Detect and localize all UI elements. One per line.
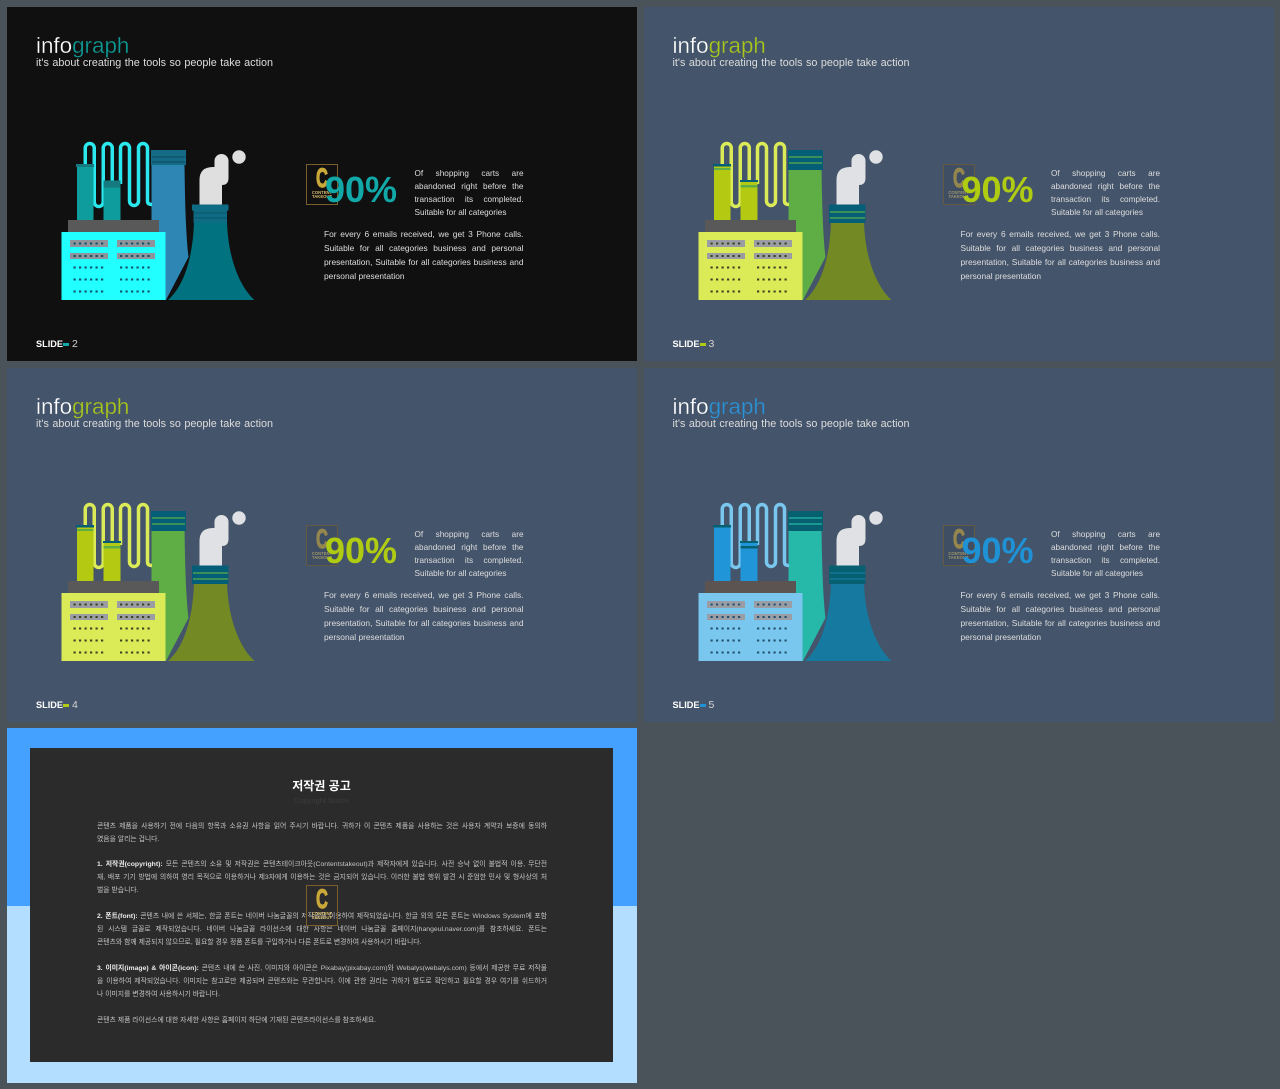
panel: slide 5	[644, 368, 1274, 722]
panel: copyright notice	[7, 728, 637, 1083]
text block: emails: Suitable for all categories business and personal	[960, 604, 1160, 614]
text block: emails: For every 6 emails received, we get 3 Phone calls.	[324, 590, 524, 600]
text block: shopping carts: Suitable for all categories	[1051, 568, 1143, 578]
text block: shopping carts: abandoned right before the	[414, 182, 524, 190]
subtitle: it's about creating the tools so people take action	[672, 418, 910, 430]
title: infograph	[36, 33, 129, 58]
logo watermark: CONTENT	[948, 550, 969, 556]
text block: shopping carts: transaction its completed.	[1051, 556, 1160, 564]
text block: emails	[960, 229, 1160, 281]
logo watermark: TAKEOUT	[312, 555, 332, 560]
text block: shopping carts	[414, 168, 524, 216]
subtitle: it's about creating the tools so people take action	[36, 418, 273, 430]
statistic: 90%: 90%	[962, 169, 1034, 210]
notice section 2: 된 시스템 글꼴로 제작되었습니다. 네이버 나눔글꼴 라이선스에 대한 사항은 네이버 나눔글꼴 홈페이지(hangeul.naver.com)를 참조하세요. 폰트는	[97, 926, 547, 933]
statistic: 90%: 90%	[962, 530, 1034, 571]
text block: shopping carts: Suitable for all categories	[414, 568, 506, 578]
slide number	[36, 338, 78, 350]
text block: emails: presentation, Suitable for all categories business and	[960, 257, 1160, 267]
slide number: SLIDE	[36, 339, 63, 349]
logo watermark: CONTENT	[312, 190, 332, 194]
notice section 3	[97, 964, 547, 998]
text block: emails	[324, 229, 524, 281]
text block: emails: presentation, Suitable for all categories business and	[324, 618, 524, 628]
text block: shopping carts: transaction its completed.	[414, 194, 524, 204]
panel: slide 2	[7, 7, 637, 361]
logo watermark: TAKEOUT	[949, 555, 968, 560]
logo watermark: CONTENT	[948, 190, 969, 194]
text block: emails: Suitable for all categories business and personal	[324, 243, 524, 253]
text block: emails: Suitable for all categories business and personal	[960, 243, 1160, 253]
logo watermark	[306, 525, 338, 566]
notice intro: 였음을 알리는 겁니다.	[97, 836, 159, 843]
notice section 2: 2. 폰트(font): 콘텐츠 내에 쓴 서체는, 한글 폰트는 네이버 나눔글꼴의 저작권을 이용하여 제작되었습니다. 한글 외의 모든 폰트는 Windows System에 포함	[97, 913, 547, 920]
slide number	[36, 698, 78, 710]
text block: shopping carts: abandoned right before the	[1051, 182, 1160, 190]
notice section 3: 3. 이미지(image) & 아이콘(icon): 콘텐츠 내에 쓴 사진, 이미지와 아이콘은 Pixabay(pixabay.com)와 Webalys(webalys.com) 등에서 제공한 무료 저작물	[97, 965, 547, 972]
text block: emails: presentation, Suitable for all categories business and	[324, 257, 524, 267]
notice section 1	[97, 860, 547, 894]
notice section 2	[97, 912, 547, 946]
text block: emails: For every 6 emails received, we get 3 Phone calls.	[960, 229, 1160, 239]
text block: emails: personal presentation	[324, 632, 405, 642]
slide number	[672, 338, 714, 350]
notice section 1: 벌을 받습니다.	[97, 887, 139, 894]
text block: shopping carts	[1051, 530, 1160, 578]
slide number: 2	[72, 338, 78, 350]
text block: shopping carts: Of shopping carts are	[414, 168, 524, 178]
text block: shopping carts: abandoned right before the	[414, 542, 524, 552]
factory illustration	[698, 142, 892, 300]
text block: emails	[324, 590, 524, 642]
logo watermark	[306, 885, 338, 926]
logo watermark	[942, 525, 974, 566]
factory illustration	[62, 142, 254, 300]
logo watermark: TAKEOUT	[312, 915, 332, 920]
notice section 1: 1. 저작권(copyright): 모든 콘텐츠의 소유 및 저작권은 콘텐츠테이크아웃(Contentstakeout)과 제작자에게 있습니다. 사전 승낙 없이 불법적 이용, 무단전	[97, 861, 547, 868]
panel: slide 4	[7, 368, 637, 722]
logo watermark: TAKEOUT	[312, 194, 332, 199]
factory illustration	[62, 502, 254, 661]
text block: emails: personal presentation	[960, 271, 1041, 281]
subtitle: it's about creating the tools so people take action	[672, 56, 910, 68]
notice intro	[97, 822, 547, 843]
slide number: 4	[72, 698, 78, 710]
slide number: SLIDE	[36, 700, 63, 710]
notice card	[30, 748, 613, 1062]
notice section 1: 재, 배포 기기 방법에 의하여 영리 목적으로 이용하거나 제3자에게 이용하는 것은 금지되어 있습니다. 이러한 불법 행위 발견 시 준엄한 민사 및 형사상의 처	[97, 874, 547, 881]
text block: shopping carts: Of shopping carts are	[414, 530, 524, 538]
slide number: SLIDE	[672, 339, 700, 349]
title: infograph	[672, 394, 766, 419]
logo watermark: CONTENT	[312, 550, 332, 556]
text block: shopping carts	[414, 530, 524, 578]
notice heading: 저작권 공고	[292, 779, 351, 793]
logo watermark	[306, 164, 338, 205]
text block: emails: For every 6 emails received, we get 3 Phone calls.	[324, 229, 524, 239]
text block: shopping carts: Of shopping carts are	[1051, 530, 1160, 538]
notice section 3: 을 이용하여 제작되었습니다. 이미지는 참고로만 제공되며 콘텐츠와는 무관합니다. 이에 관한 권리는 귀하가 별도로 확인하고 필요할 경우 여기를 쉬드하거	[97, 978, 547, 985]
notice license line: 콘텐츠 제품 라이선스에 대한 자세한 사항은 홈페이지 하단에 기재된 콘텐츠라이선스를 참조하세요.	[97, 1017, 376, 1024]
panel: slide 3	[644, 7, 1274, 361]
logo watermark	[942, 164, 974, 205]
slide number: SLIDE	[672, 700, 700, 710]
notice subheading: Copyright Notice	[294, 796, 349, 805]
subtitle: it's about creating the tools so people take action	[36, 56, 273, 68]
factory illustration	[698, 502, 892, 661]
text block: emails: personal presentation	[324, 271, 405, 281]
logo watermark: CONTENT	[312, 910, 332, 916]
statistic: 90%: 90%	[325, 169, 397, 210]
text block: emails: Suitable for all categories business and personal	[324, 604, 524, 614]
text block: shopping carts: transaction its completed.	[1051, 194, 1160, 204]
text block: emails: personal presentation	[960, 632, 1041, 642]
text block: emails: presentation, Suitable for all categories business and	[960, 618, 1160, 628]
text block: shopping carts: abandoned right before the	[1051, 542, 1160, 552]
statistic: 90%: 90%	[325, 530, 397, 571]
text block: shopping carts	[1051, 168, 1160, 216]
text block: emails	[960, 590, 1160, 642]
slide number: 5	[708, 698, 714, 710]
slide number	[672, 698, 714, 710]
notice intro: 콘텐츠 제품을 사용하기 전에 다음의 항목과 소유권 사항을 읽어 주시기 바랍니다. 귀하가 이 콘텐츠 제품을 사용하는 것은 사용자 계약과 보증에 동의하	[97, 823, 547, 830]
title: infograph	[672, 33, 766, 58]
text block: emails: For every 6 emails received, we get 3 Phone calls.	[960, 590, 1160, 600]
slide number: 3	[708, 338, 714, 350]
text block: shopping carts: transaction its completed.	[414, 556, 524, 564]
title: infograph	[36, 394, 129, 419]
text block: shopping carts: Suitable for all categories	[414, 208, 506, 216]
logo watermark: TAKEOUT	[949, 194, 968, 199]
notice section 3: 나 이미지를 변경하여 사용하시기 바랍니다.	[97, 991, 220, 998]
notice section 2: 콘텐츠와 함께 제공되지 않으므로, 필요할 경우 정품 폰트를 구입하거나 다른 폰트로 변경하여 사용하시기 바랍니다.	[97, 939, 421, 946]
text block: shopping carts: Of shopping carts are	[1051, 168, 1160, 178]
text block: shopping carts: Suitable for all categories	[1051, 208, 1143, 216]
